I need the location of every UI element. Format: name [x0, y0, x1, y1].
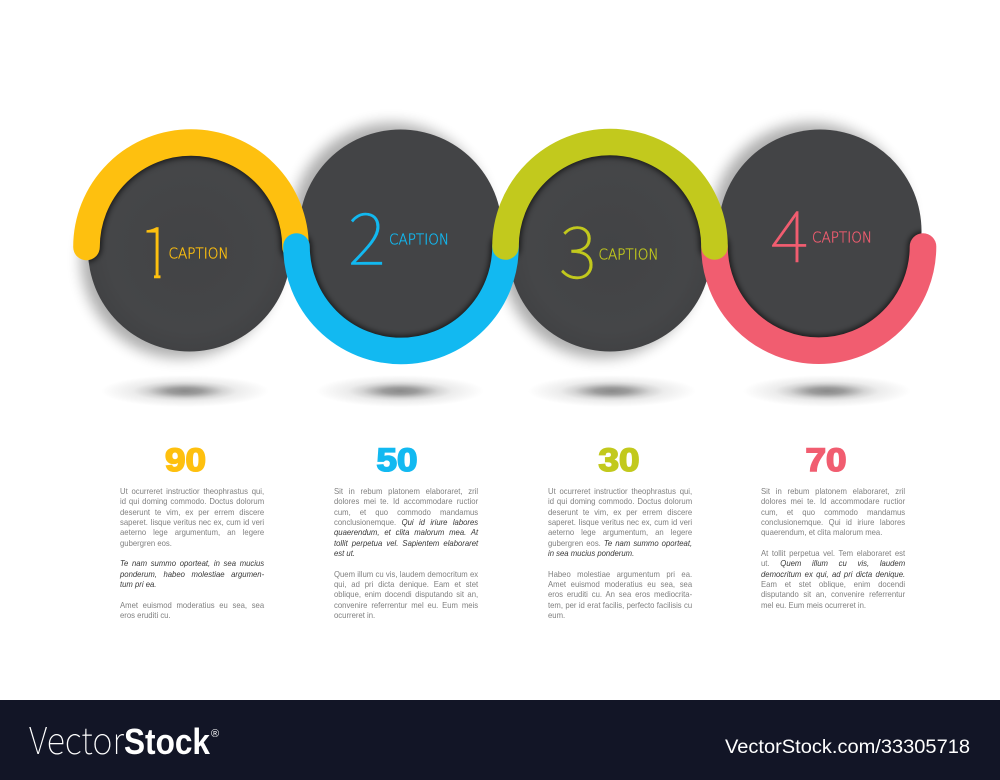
value 70: 70: [806, 442, 846, 478]
inner shadow 1: [86, 142, 296, 247]
text column 3: eum.: [548, 610, 565, 620]
inner shadow 3: [518, 155, 702, 258]
text column 2: dolores mei te. Id accommodare ructior: [334, 496, 478, 506]
numeral 3: 3: [559, 194, 597, 299]
text column 2: [334, 486, 478, 620]
text column 3: [548, 486, 692, 620]
circle 4 drop shadow: [712, 123, 910, 321]
floor shadow 1: [101, 375, 269, 407]
value 90: 90: [165, 442, 206, 478]
text column 1: id qui doming commodo. Doctus dolorum: [120, 496, 264, 506]
value 50: 50: [376, 442, 418, 478]
text column 3: tem, per id erat facilis, perfecto facilisis cu: [548, 600, 692, 610]
text column 1: deserunt te vim, ex per errem discere: [120, 507, 264, 517]
text column 2: Quem illum cu vis, laudem democritum ex: [334, 569, 478, 579]
text column 1: ponderum, habeo molestiae argumen-: [120, 569, 264, 579]
text column 4: dolores mei te. Id accommodare ructior: [761, 496, 905, 506]
numeral 4: 4: [771, 178, 809, 283]
text column 1: tum pri ea.: [120, 579, 156, 589]
logo: Stock: [124, 721, 211, 762]
text column 4: Sit in rebum platonem elaboraret, zril: [761, 486, 905, 496]
logo: ®: [211, 728, 219, 740]
footer bar: [0, 700, 1000, 780]
circle 2 drop shadow: [292, 123, 490, 321]
circle 3 drop shadow: [502, 160, 700, 358]
text column 3: id qui doming commodo. Doctus dolorum: [548, 496, 692, 506]
text column 3: deserunt te vim, ex per errem discere: [548, 507, 692, 517]
text column 4: At tollit perpetua vel. Tem elaboraret est: [761, 548, 905, 558]
text column 1: eros eruditi cu.: [120, 610, 171, 620]
text column 4: cum, et quo commodo mandamus: [761, 507, 905, 517]
logo: [29, 711, 219, 765]
text column 2: Sit in rebum platonem elaboraret, zril: [334, 486, 478, 496]
text column 3: gubergren eos. Te nam summo oporteat,: [548, 538, 692, 548]
caption 2: CAPTION: [389, 230, 449, 248]
text column 4: ut. Quem illum cu vis, laudem: [761, 558, 905, 568]
numeral 1: 1: [137, 194, 175, 299]
text column 1: aeterno lege argumentum, an legere: [120, 527, 264, 537]
text column 4: disputando sit an, convenire referrentur: [761, 589, 905, 599]
text column 3: Ut ocurreret instructior theophrastus qui,: [548, 486, 692, 496]
caption 1: CAPTION: [168, 244, 228, 262]
value 30: 30: [598, 442, 640, 478]
text column 1: Ut ocurreret instructior theophrastus qui,: [120, 486, 264, 496]
text column 2: quaerendum, et clita malorum mea. At: [334, 527, 478, 537]
caption 4: CAPTION: [812, 228, 872, 246]
text column 4: quaerendum, et clita malorum mea.: [761, 527, 882, 537]
text column 3: eros eruditi cu. An sea eros mediocrita-: [548, 589, 692, 599]
text column 2: convenire referrentur mel eu. Eum meis: [334, 600, 478, 610]
floor shadow 2: [316, 375, 484, 407]
text column 4: [761, 486, 906, 610]
caption 3: CAPTION: [598, 246, 658, 264]
text column 2: est ut.: [334, 548, 355, 558]
text column 3: Habeo molestiae argumentum pri ea.: [548, 569, 692, 579]
logo: Vector: [29, 711, 124, 765]
text column 1: gubergren eos.: [120, 538, 172, 548]
circle 4: [718, 130, 922, 340]
text column 4: democritum ex qui, ad pri dicta denique.: [761, 569, 905, 579]
text column 2: ocurreret in.: [334, 610, 375, 620]
text column 4: Eam et stet oblique, enim docendi: [761, 579, 905, 589]
green arc: [506, 142, 714, 246]
text column 1: Te nam summo oporteat, in sea mucius: [120, 558, 264, 568]
circle 1 drop shadow: [81, 160, 279, 358]
text column 2: cum, et quo commodo mandamus: [334, 507, 478, 517]
text column 2: conclusionemque. Qui id iriure labores: [334, 517, 478, 527]
text column 1: saperet. Iisque veritus nec ex, cum id veri: [120, 517, 264, 527]
text column 1: Amet euismod moderatius eu sea, sea: [120, 600, 264, 610]
text column 4: mel eu. Eum meis ocurreret in.: [761, 600, 866, 610]
text column 1: [120, 486, 264, 620]
infographic graphic: circles and arcs: [73, 115, 936, 478]
text column 3: aeterno lege argumentum, an legere: [548, 527, 692, 537]
circle 1: [88, 148, 291, 352]
inner shadow 4: [714, 246, 923, 351]
inner shadow 2: [308, 234, 492, 338]
numeral 2: 2: [348, 180, 386, 286]
text column 3: in sea mucius ponderum.: [548, 548, 634, 558]
circle 2: [299, 130, 502, 340]
image id: VectorStock.com/33305718: [725, 737, 970, 758]
text column 2: tollit perpetua vel. Sapientem elaboraret: [334, 538, 478, 548]
text column 2: qui, ad pri dicta denique. Eam et stet: [334, 579, 478, 589]
blue arc: [296, 246, 506, 351]
text column 3: Amet euismod moderatius eu sea, sea: [548, 579, 692, 589]
text column 3: saperet. Iisque veritus nec ex, cum id veri: [548, 517, 692, 527]
red arc: [714, 246, 923, 351]
floor shadow 3: [528, 375, 696, 407]
floor shadow 4: [743, 375, 911, 407]
yellow arc: [86, 142, 296, 247]
text column 2: oblique, enim docendi disputando sit an,: [334, 589, 478, 599]
text column 4: conclusionemque. Qui id iriure labores: [761, 517, 905, 527]
circle 3: [508, 148, 712, 352]
